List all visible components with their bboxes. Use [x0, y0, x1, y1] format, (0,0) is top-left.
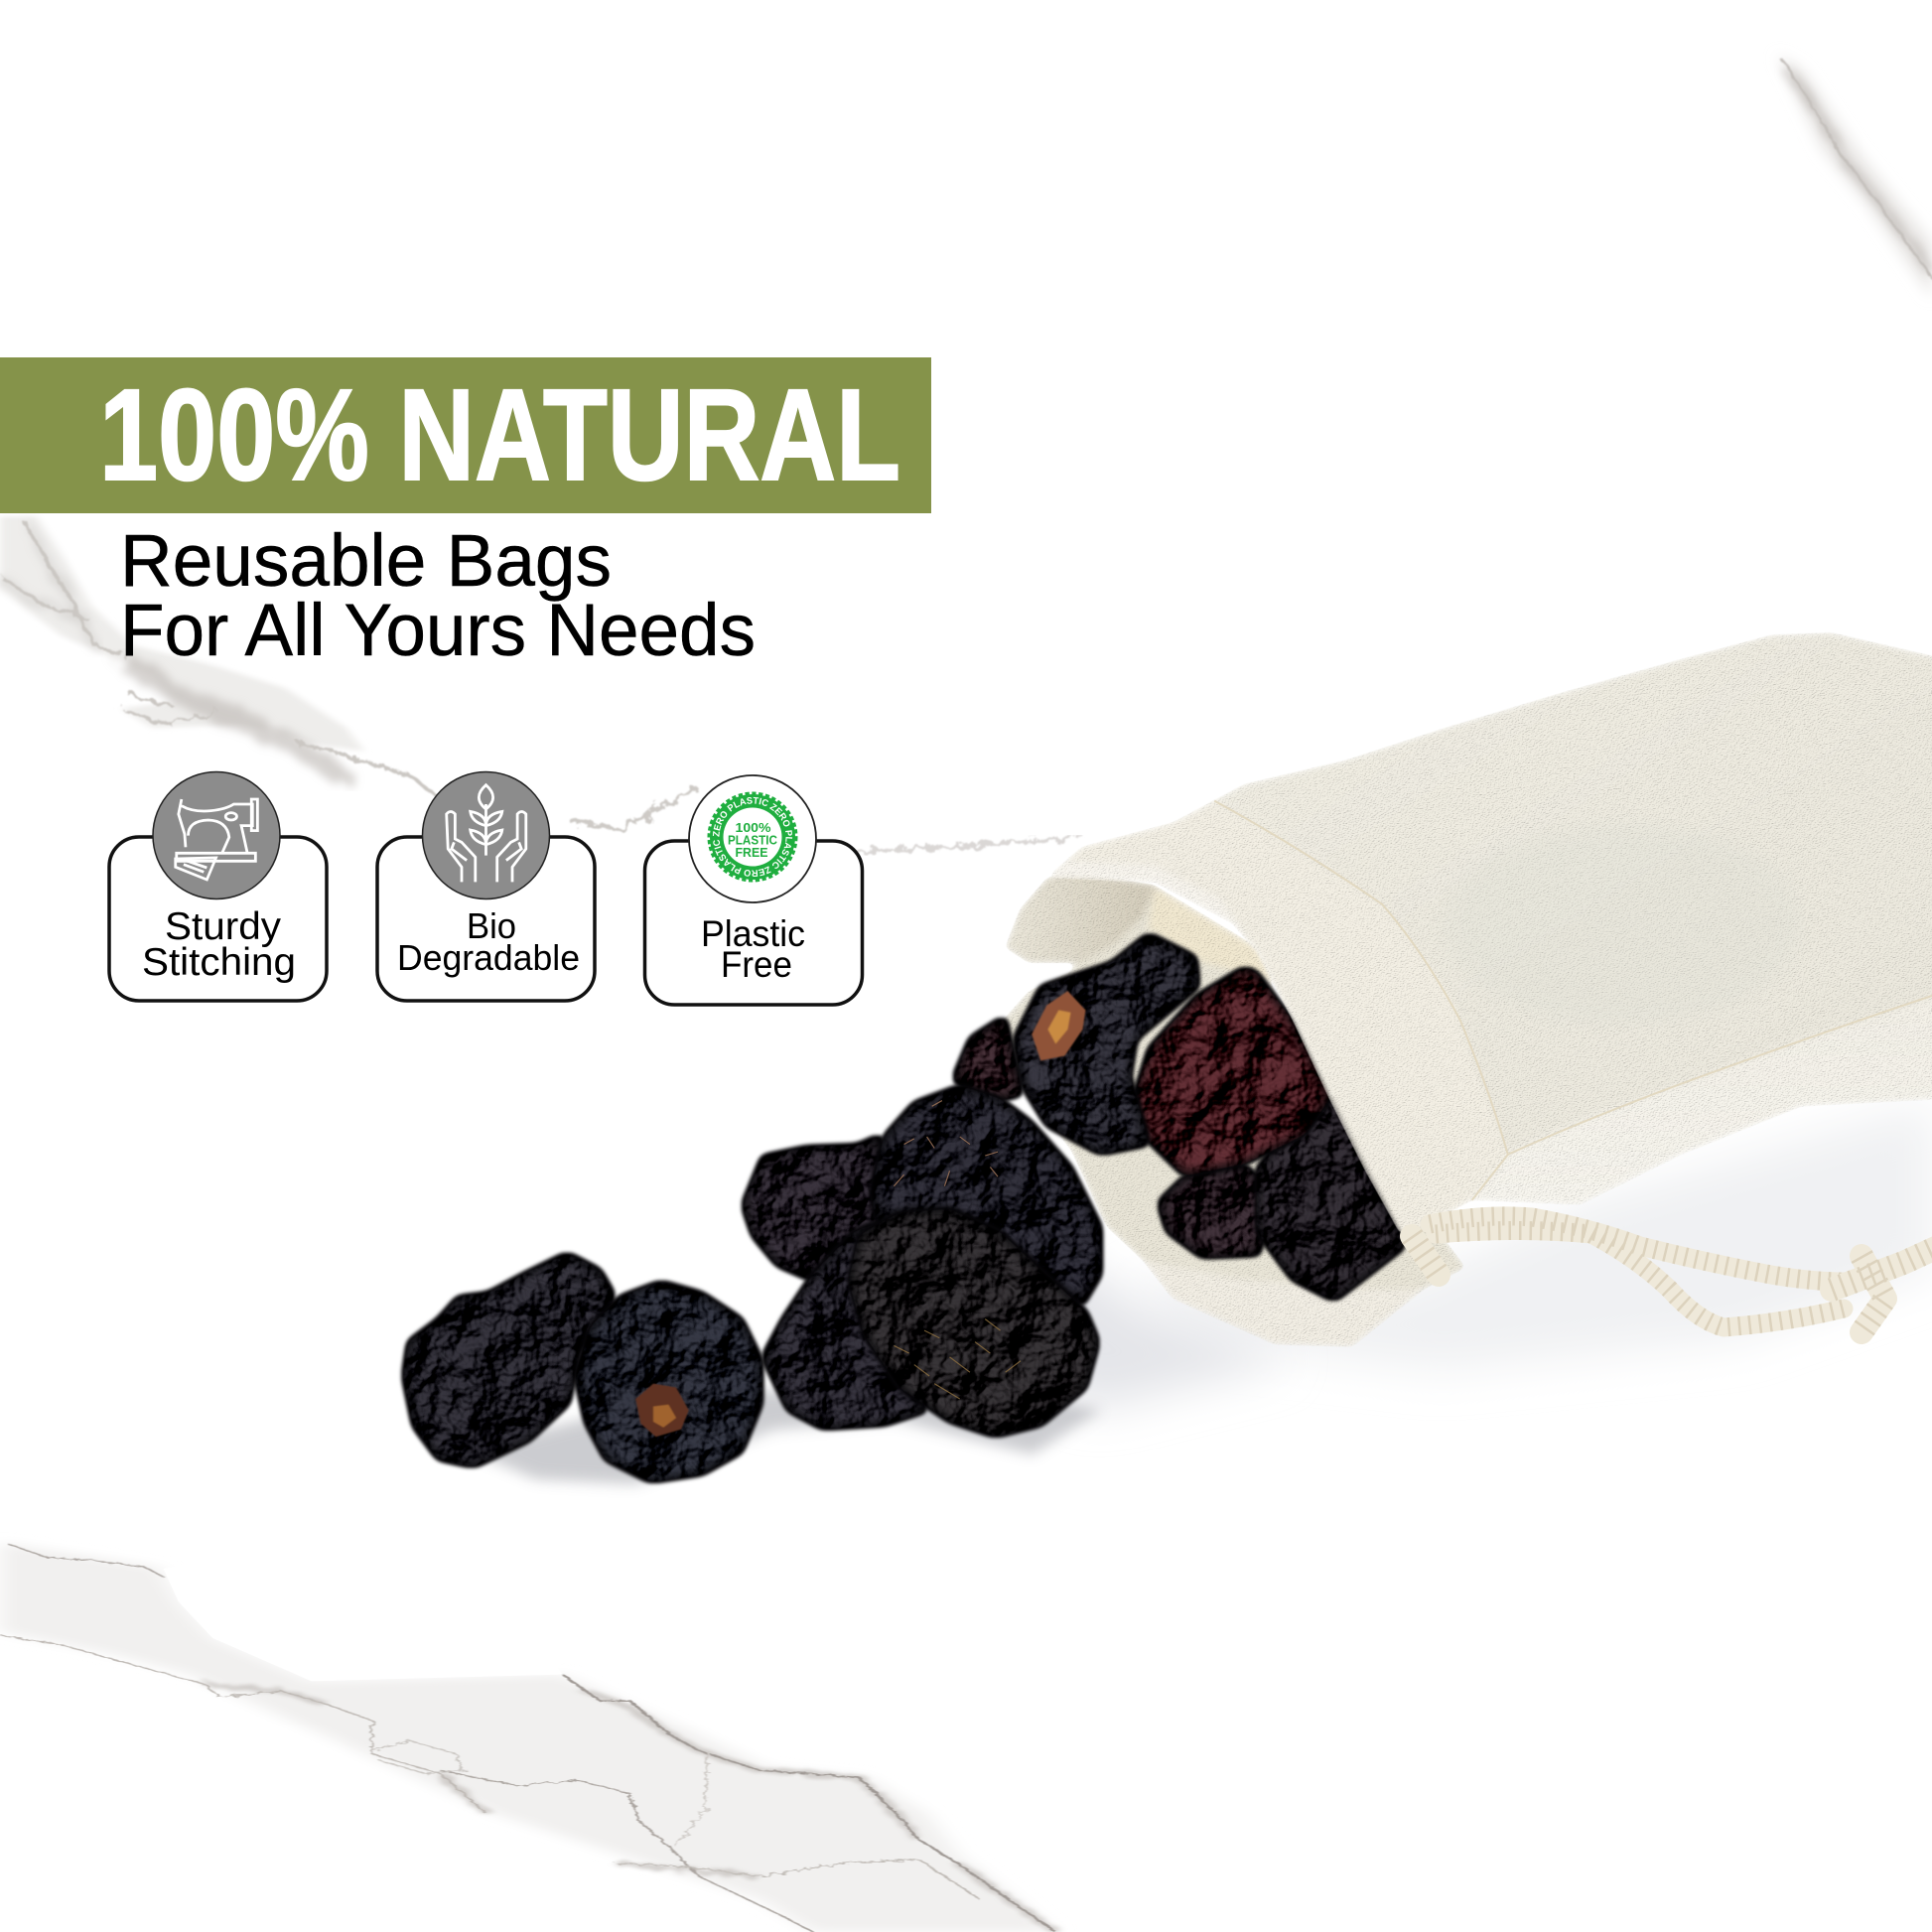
label: bio degradable — [397, 905, 580, 978]
marble vein: left diagonal streak — [0, 516, 1087, 854]
label: sturdy stitching: Stitching — [142, 941, 296, 984]
date: maroon — [1134, 967, 1331, 1176]
date: upper large — [871, 1085, 1102, 1308]
date: large front — [848, 1209, 1099, 1437]
feature card: sturdy stitching — [109, 772, 327, 1001]
label: bio degradable: Bio — [467, 905, 516, 946]
icon: zero plastic badge: 100% — [735, 820, 771, 835]
subheading: Reusable Bags — [120, 519, 612, 602]
label: plastic free — [701, 913, 805, 985]
subheading — [120, 519, 756, 671]
date: lower dark — [1256, 1097, 1406, 1302]
date: round with stem — [575, 1281, 762, 1482]
bag back panel and flap underside — [999, 871, 1466, 1347]
icon: hands holding wheat — [447, 785, 526, 882]
bag front panel — [1046, 632, 1932, 1234]
date skin flecks — [894, 1101, 1021, 1399]
date stem: round date — [635, 1384, 689, 1437]
label: sturdy stitching — [142, 905, 296, 984]
drawstring rope — [1412, 1216, 1932, 1332]
date: bottom middle — [762, 1220, 929, 1430]
marble band: bottom — [0, 1542, 1056, 1932]
date: far left — [403, 1253, 616, 1467]
label: plastic free: Plastic — [701, 913, 805, 954]
banner title: 100% NATURAL — [99, 361, 900, 507]
subheading: For All Yours Needs — [120, 589, 756, 671]
date: top dark — [1014, 933, 1199, 1155]
icon: zero plastic badge: PLASTIC — [728, 832, 778, 848]
date stem: golden — [1032, 991, 1086, 1060]
feature card: bio degradable — [377, 772, 595, 1001]
date: rear brown — [1158, 1165, 1275, 1258]
icon: sewing machine — [176, 799, 257, 880]
icon: zero plastic badge: FREE — [735, 845, 768, 860]
label: sturdy stitching: Sturdy — [165, 905, 282, 948]
feature card: plastic free — [643, 774, 864, 1007]
shadows under bag and dates — [467, 1102, 1932, 1484]
date: back left — [742, 1133, 884, 1281]
bag mottling — [1442, 822, 1801, 1025]
label: bio degradable: Degradable — [397, 937, 580, 978]
label: plastic free: Free — [721, 944, 792, 985]
bag seams — [1214, 801, 1932, 1200]
product: cotton drawstring bag with dates — [403, 632, 1932, 1482]
date: small dark red — [952, 1015, 1024, 1101]
icon: zero plastic badge: ZERO PLASTIC ZERO PLASTIC ZERO PLASTIC — [713, 796, 792, 877]
marble vein: upper right — [1777, 55, 1932, 298]
green banner — [0, 357, 931, 513]
